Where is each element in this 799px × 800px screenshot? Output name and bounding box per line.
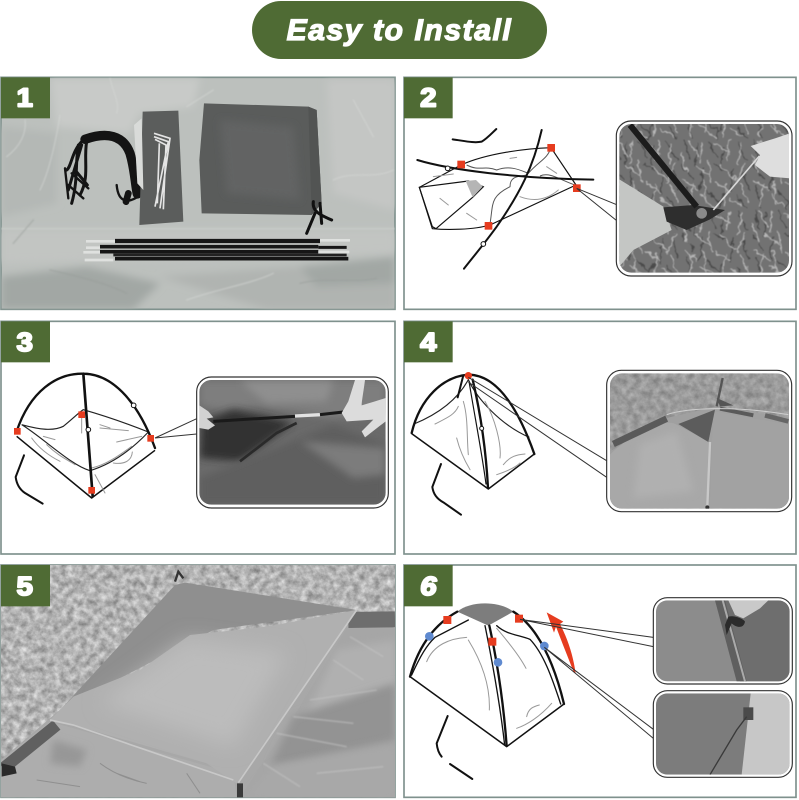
tent poles [83,240,350,260]
callout lines [155,419,197,438]
title: Easy to Install: Easy to Install [287,14,512,47]
hands [199,405,215,430]
fabric folds [1,78,395,309]
pole [707,442,710,506]
half-raised tent diagram [14,374,155,504]
inset photo: corner staked in grass [616,120,793,277]
dome pole [17,374,155,448]
tent flat diagram [417,129,593,269]
callout lines top [520,619,653,647]
stake and hand [713,156,759,210]
panel 4: tent raised, clip at top [404,321,796,554]
number badge 5: 5 [17,571,33,601]
centre pole [473,380,488,488]
pole joints [445,166,450,171]
panel 6: finish rainfly and guy lines [404,565,796,797]
number badge 4 [404,321,453,362]
spare pole [16,455,43,504]
tent left flank [44,797,236,798]
centre pole [83,374,93,496]
panel 3: insert poles into sleeves [1,321,395,554]
tent corner [619,179,672,267]
number badge 1: 1 [17,83,33,112]
callout lines [468,377,607,477]
pole lines [410,612,564,704]
panel 1: parts laid out on tent fabric [1,77,395,309]
tent body [610,406,789,509]
red marker [465,372,472,379]
rainfly top [457,603,513,626]
red markers [14,428,21,435]
title: Easy to Install [252,1,547,59]
blue markers [425,632,434,641]
inset photo: pole in sleeve [197,377,388,508]
panel 5: rainfly sheet on tent [1,565,395,797]
stakes [154,133,170,209]
poles [417,160,593,180]
spare pole [437,716,448,757]
red arrow [547,612,576,673]
tent base under sheet [1,610,395,797]
wrinkles on flank [263,637,383,787]
number badge 3 [1,321,50,362]
pole joints [86,427,91,432]
callout lines bottom [544,647,653,738]
folded tent bag [199,103,322,215]
tent right flank [240,628,395,797]
red markers [443,616,451,624]
number badge 3: 3 [17,327,33,357]
joint [480,426,484,430]
number badge 6: 6 [420,571,437,601]
panel 2: lay out tent and stake [404,77,799,309]
number badge 1 [1,77,50,118]
number badge 4: 4 [420,327,437,357]
dark inner peak [678,410,715,442]
inset photo: hook on pole [653,598,792,684]
number badge 2 [404,77,453,118]
tent with rainfly diagram [410,603,564,779]
webbing [613,419,667,444]
rope bundle [65,135,143,203]
top hook [175,572,183,582]
pole and ferrule [213,416,295,421]
number badge 5 [1,565,50,606]
number badge 6 [404,565,453,606]
dome pole [412,375,534,454]
tent diagram [412,372,534,515]
edge webbing [3,725,57,768]
spare pole [432,464,461,515]
sheet top surface [62,610,354,716]
underside of sheet [62,583,357,708]
pole [630,125,697,207]
inset photo: guy line [653,691,792,777]
spare pole [453,129,496,142]
callout lines [577,188,617,221]
red markers [457,161,465,168]
inset photo: tent top [607,370,792,512]
number badge 2: 2 [420,83,436,112]
bag drawcord [307,202,332,233]
stake bag [139,111,183,225]
